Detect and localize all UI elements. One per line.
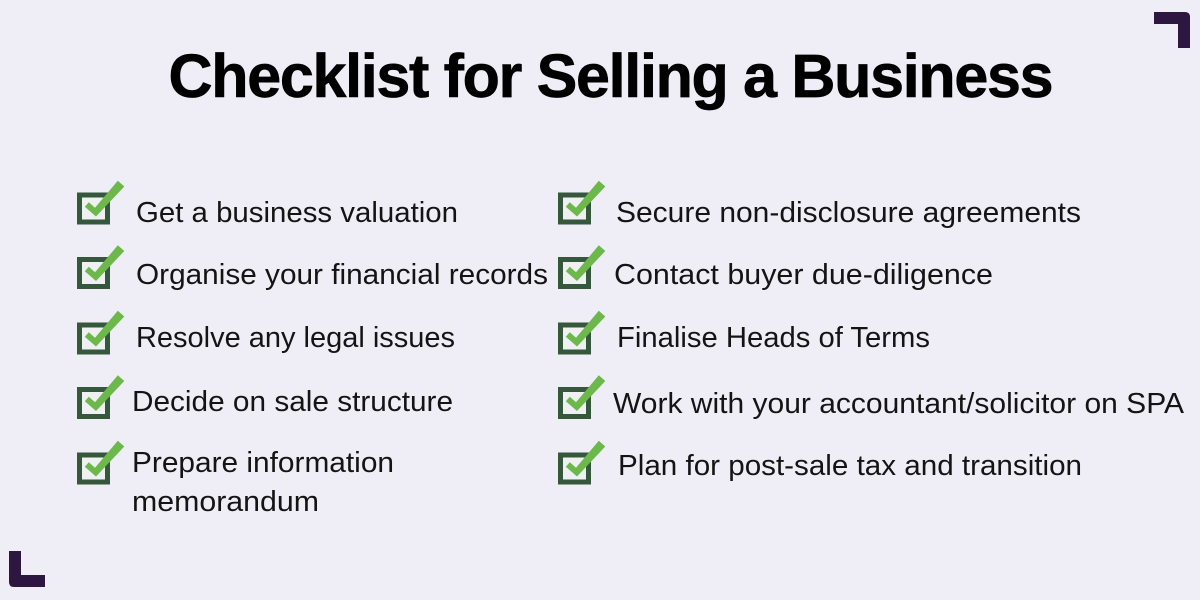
item: buyer due-diligence: Contact buyer due-diligence bbox=[614, 259, 993, 291]
item: tax and transition bbox=[560, 441, 1082, 482]
item: legal issues bbox=[80, 311, 455, 354]
item: heads of terms bbox=[560, 311, 930, 354]
item: sale structure: Decide on sale structure bbox=[132, 386, 453, 418]
item: non-disclosure agreements bbox=[560, 181, 1081, 229]
item: legal issues: Resolve any legal issues bbox=[136, 322, 455, 354]
corner bracket: top right bbox=[1154, 12, 1190, 48]
item: information memorandum bbox=[80, 441, 394, 518]
item: heads of terms: Finalise Heads of Terms bbox=[617, 322, 930, 354]
item: business valuation: Get a business valuation bbox=[136, 197, 458, 229]
item: non-disclosure agreements: Secure non-disclosure agreements bbox=[616, 197, 1081, 229]
item: buyer due-diligence bbox=[560, 245, 993, 291]
item: tax and transition: Plan for post-sale tax and transition bbox=[618, 450, 1082, 482]
checklist: right column bbox=[560, 181, 1185, 482]
checklist: left column bbox=[80, 181, 548, 518]
title: Checklist for Selling a Business bbox=[168, 42, 1054, 110]
item: financial records: Organise your financial records bbox=[136, 259, 548, 291]
item: business valuation bbox=[80, 181, 458, 229]
item: sale structure bbox=[80, 375, 453, 418]
item: accountant and solicitor bbox=[560, 375, 1185, 420]
item: accountant and solicitor: Work with your accountant/solicitor on SPA bbox=[613, 388, 1185, 420]
item: information memorandum: memorandum bbox=[132, 486, 319, 518]
item: information memorandum: Prepare information bbox=[132, 447, 394, 479]
item: financial records bbox=[80, 245, 548, 291]
corner bracket: bottom left bbox=[9, 551, 45, 587]
